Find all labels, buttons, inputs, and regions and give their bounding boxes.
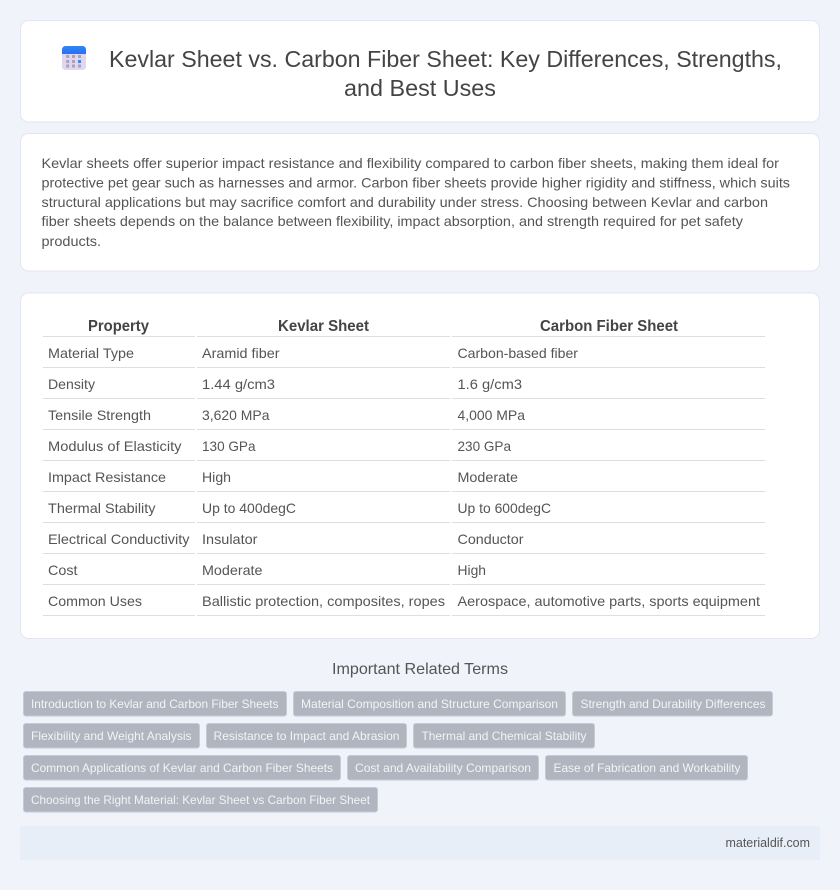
row: impact resistance: High <box>202 469 231 485</box>
row: tensile strength <box>48 407 525 423</box>
row: cost: High <box>458 562 486 578</box>
tag: Flexibility and Weight Analysis <box>31 729 192 743</box>
row: density <box>48 376 522 392</box>
table header row <box>88 318 678 335</box>
row: electrical conductivity: Conductor <box>458 531 524 547</box>
row: impact resistance <box>48 469 518 485</box>
row: tensile strength: 4,000 MPa <box>458 407 525 423</box>
tag: Thermal and Chemical Stability <box>422 729 586 743</box>
row: impact resistance: Impact Resistance <box>48 469 166 485</box>
row: thermal stability: Thermal Stability <box>48 500 156 516</box>
table header row: Carbon Fiber Sheet <box>540 318 678 335</box>
tag <box>414 724 594 748</box>
tag <box>24 724 200 748</box>
tag <box>546 756 748 780</box>
row: cost <box>48 562 486 578</box>
summary text <box>42 155 790 249</box>
tag <box>348 756 538 780</box>
related term tags <box>24 692 772 812</box>
row: common uses <box>48 593 760 609</box>
tag <box>24 788 378 812</box>
row: thermal stability <box>48 500 551 516</box>
table header row: Kevlar Sheet <box>278 318 369 335</box>
row: modulus of elasticity: 230 GPa <box>458 438 511 454</box>
row: thermal stability: Up to 400degC <box>202 500 296 516</box>
row: density: Density <box>48 376 95 392</box>
tag <box>24 692 286 716</box>
table header row: Property <box>88 318 149 335</box>
summary text: structural applications but may sacrifice comfort and durability under stress. Choosing between Kevlar and carbon <box>42 194 768 210</box>
footer: materialdif.com <box>726 836 810 850</box>
row: electrical conductivity: Electrical Conductivity <box>48 531 190 547</box>
tag: Material Composition and Structure Comparison <box>301 697 558 711</box>
panel: summary <box>20 134 820 271</box>
tag: Common Applications of Kevlar and Carbon Fiber Sheets <box>31 761 333 775</box>
row: common uses: Ballistic protection, composites, ropes <box>202 593 445 609</box>
icon: calendar <box>62 46 86 70</box>
row: material type: Material Type <box>48 345 134 361</box>
row: density: 1.6 g/cm3 <box>458 376 522 392</box>
row: impact resistance: Moderate <box>458 469 518 485</box>
row: cost: Moderate <box>202 562 263 578</box>
row: thermal stability: Up to 600degC <box>458 500 551 516</box>
tag <box>572 692 772 716</box>
tag: Introduction to Kevlar and Carbon Fiber Sheets <box>31 697 278 711</box>
title <box>109 46 782 101</box>
row: electrical conductivity <box>48 531 524 547</box>
tag: Resistance to Impact and Abrasion <box>214 729 400 743</box>
row: modulus of elasticity <box>48 438 511 454</box>
row: electrical conductivity: Insulator <box>202 531 258 547</box>
row: density: 1.44 g/cm3 <box>202 376 275 392</box>
title: and Best Uses <box>344 75 496 101</box>
tag: Choosing the Right Material: Kevlar Sheet vs Carbon Fiber Sheet <box>31 793 371 807</box>
row: material type <box>48 345 578 361</box>
row: cost: Cost <box>48 562 78 578</box>
summary text: fiber sheets depends on the balance between flexibility, impact absorption, and strength required for pet safety <box>42 213 743 229</box>
row: material type: Aramid fiber <box>202 345 280 361</box>
tag <box>24 756 340 780</box>
row: tensile strength: Tensile Strength <box>48 407 151 423</box>
tag <box>206 724 406 748</box>
tag: Strength and Durability Differences <box>580 697 766 711</box>
panel: comparison table <box>20 293 820 638</box>
row: modulus of elasticity: Modulus of Elasticity <box>48 438 182 454</box>
heading: related terms: Important Related Terms <box>332 661 508 678</box>
row: material type: Carbon-based fiber <box>458 345 578 361</box>
tag: Cost and Availability Comparison <box>355 761 531 775</box>
tag: Ease of Fabrication and Workability <box>554 761 740 775</box>
summary text: products. <box>42 233 101 249</box>
title: Kevlar Sheet vs. Carbon Fiber Sheet: Key Differences, Strengths, <box>109 46 782 72</box>
row: common uses: Common Uses <box>48 593 142 609</box>
footer <box>20 826 820 860</box>
row: modulus of elasticity: 130 GPa <box>202 438 256 454</box>
panel: header <box>20 20 820 122</box>
row: tensile strength: 3,620 MPa <box>202 407 270 423</box>
summary text: protective pet gear such as harnesses and armor. Carbon fiber sheets provide higher rigidity and stiffness, which suits <box>42 174 790 190</box>
row: common uses: Aerospace, automotive parts, sports equipment <box>458 593 760 609</box>
tag <box>294 692 566 716</box>
summary text: Kevlar sheets offer superior impact resistance and flexibility compared to carbon fiber sheets, making them ideal for <box>42 155 779 171</box>
